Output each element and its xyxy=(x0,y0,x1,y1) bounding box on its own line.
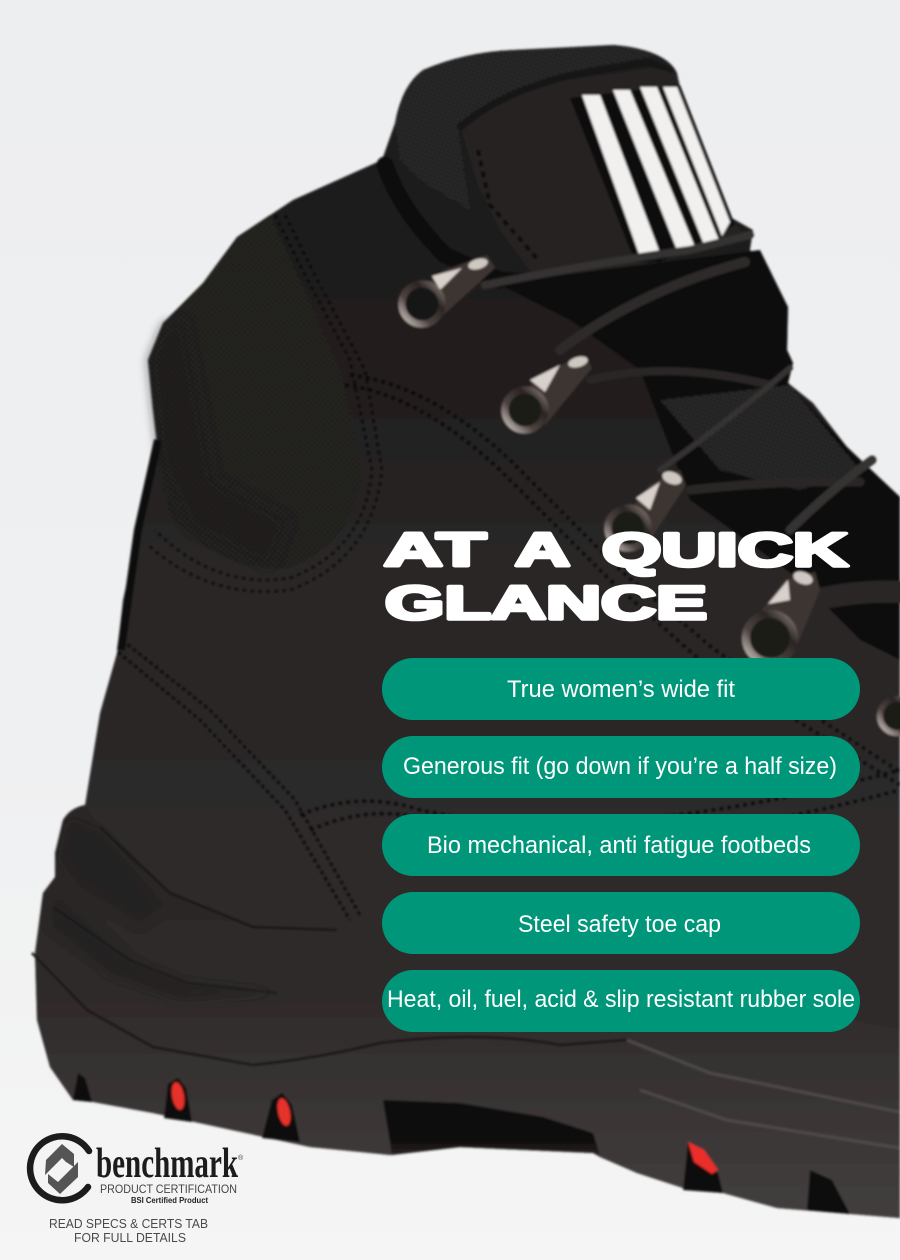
eyelet 1 xyxy=(402,255,495,324)
logo ring xyxy=(30,1136,89,1200)
lug notch 3 xyxy=(262,1093,300,1142)
eyelet tip xyxy=(567,355,589,369)
lace 5 xyxy=(660,368,790,470)
eyelet arm xyxy=(762,572,820,650)
feature pill 4: Steel safety toe cap xyxy=(518,911,721,938)
sole ridge highlight lower xyxy=(640,1090,900,1148)
outsole and rand xyxy=(35,805,900,1218)
title word QUICK: QUICK xyxy=(602,523,848,576)
sole ridge highlight upper xyxy=(627,1040,900,1112)
feature pill 3: Bio mechanical, anti fatigue footbeds xyxy=(427,832,811,859)
reflective stripes xyxy=(570,85,735,262)
eyelet ring xyxy=(608,508,648,548)
tongue gusset xyxy=(470,250,900,660)
eyelet highlight xyxy=(636,482,660,510)
lug notch 4 xyxy=(683,1142,723,1193)
lace 1 xyxy=(385,165,500,280)
eyelet highlight xyxy=(768,580,790,604)
lace 6 xyxy=(690,482,860,490)
logo hexagon mark xyxy=(45,1144,78,1194)
eyelet tip xyxy=(661,469,683,487)
feature pill 5: Heat, oil, fuel, acid & slip resistant rubber sole xyxy=(387,986,855,1013)
eyelet highlight xyxy=(432,268,462,290)
footnote xyxy=(49,1217,208,1245)
bsi certified product: BSI Certified Product xyxy=(131,1196,208,1205)
heel bump shade xyxy=(62,822,165,925)
lug notch 5 xyxy=(807,1170,850,1214)
footnote line 1: READ SPECS & CERTS TAB xyxy=(49,1217,208,1231)
laces xyxy=(385,165,900,600)
red sole marker 1 xyxy=(170,1081,186,1111)
lace 2 xyxy=(485,235,750,285)
hexagon lower half xyxy=(48,1162,78,1194)
collar mesh xyxy=(395,45,657,210)
stitching xyxy=(118,215,900,920)
eyelet 4 xyxy=(746,569,820,662)
lace 8 xyxy=(815,592,900,600)
tongue stitching xyxy=(478,150,540,262)
tongue panel xyxy=(462,68,745,275)
feature pill 1: True women’s wide fit xyxy=(507,676,735,703)
feature pill 4 xyxy=(382,892,860,954)
sole arch shadow xyxy=(383,1100,600,1155)
registered mark: ® xyxy=(238,1154,244,1162)
footnote line 2: FOR FULL DETAILS xyxy=(74,1231,186,1245)
eyelet arm xyxy=(630,470,686,540)
hexagon upper half xyxy=(45,1144,74,1175)
red sole marker 3 xyxy=(688,1142,718,1174)
eyelet 5 xyxy=(880,699,900,733)
collar piping xyxy=(458,62,672,128)
stripe 1 xyxy=(582,95,660,257)
eyelet 2 xyxy=(505,355,592,430)
title word AT: AT xyxy=(384,523,486,576)
stripe 2 xyxy=(613,90,695,250)
rand seam xyxy=(100,827,337,930)
red sole marker 2 xyxy=(275,1097,293,1127)
lug notch 2 xyxy=(164,1078,192,1122)
eyelet tip xyxy=(792,569,814,587)
stripe 4 xyxy=(663,87,730,236)
feature pill 2 xyxy=(382,736,860,798)
title word A: A xyxy=(515,523,570,576)
sole top seam xyxy=(32,953,627,1065)
eyelet ring xyxy=(505,390,545,430)
stripe 3 xyxy=(640,87,720,247)
lug notch 1 xyxy=(73,1073,92,1102)
eyelet 3 xyxy=(608,469,686,548)
feature pill 3 xyxy=(382,814,860,876)
lower heel shade xyxy=(50,895,277,1000)
sole lugs xyxy=(73,1073,850,1214)
feature pill 5 xyxy=(382,970,860,1032)
eyelet ring xyxy=(746,614,794,662)
title xyxy=(384,523,848,629)
lace 3 xyxy=(560,262,745,350)
eyelet arm xyxy=(525,355,592,425)
padded collar shade xyxy=(148,320,290,570)
feature pill 2: Generous fit (go down if you’re a half size) xyxy=(403,753,837,780)
product certification: PRODUCT CERTIFICATION xyxy=(100,1184,237,1196)
rand crease xyxy=(53,907,277,993)
lace 7 xyxy=(790,460,872,530)
eyelet ring xyxy=(402,284,442,324)
wordmark: benchmark xyxy=(96,1141,238,1187)
eyelet ring xyxy=(880,699,900,733)
lace 4 xyxy=(590,371,770,385)
benchmark logo xyxy=(30,1136,244,1205)
eyelet highlight xyxy=(530,365,560,392)
tongue mesh inner xyxy=(660,385,860,490)
feature pill 1 xyxy=(382,658,860,720)
eyelet tip xyxy=(467,257,489,271)
stripe backing xyxy=(570,85,735,262)
back padded mesh xyxy=(148,215,362,569)
eyelet arm xyxy=(425,255,495,318)
title line 2: GLANCE xyxy=(385,576,707,629)
